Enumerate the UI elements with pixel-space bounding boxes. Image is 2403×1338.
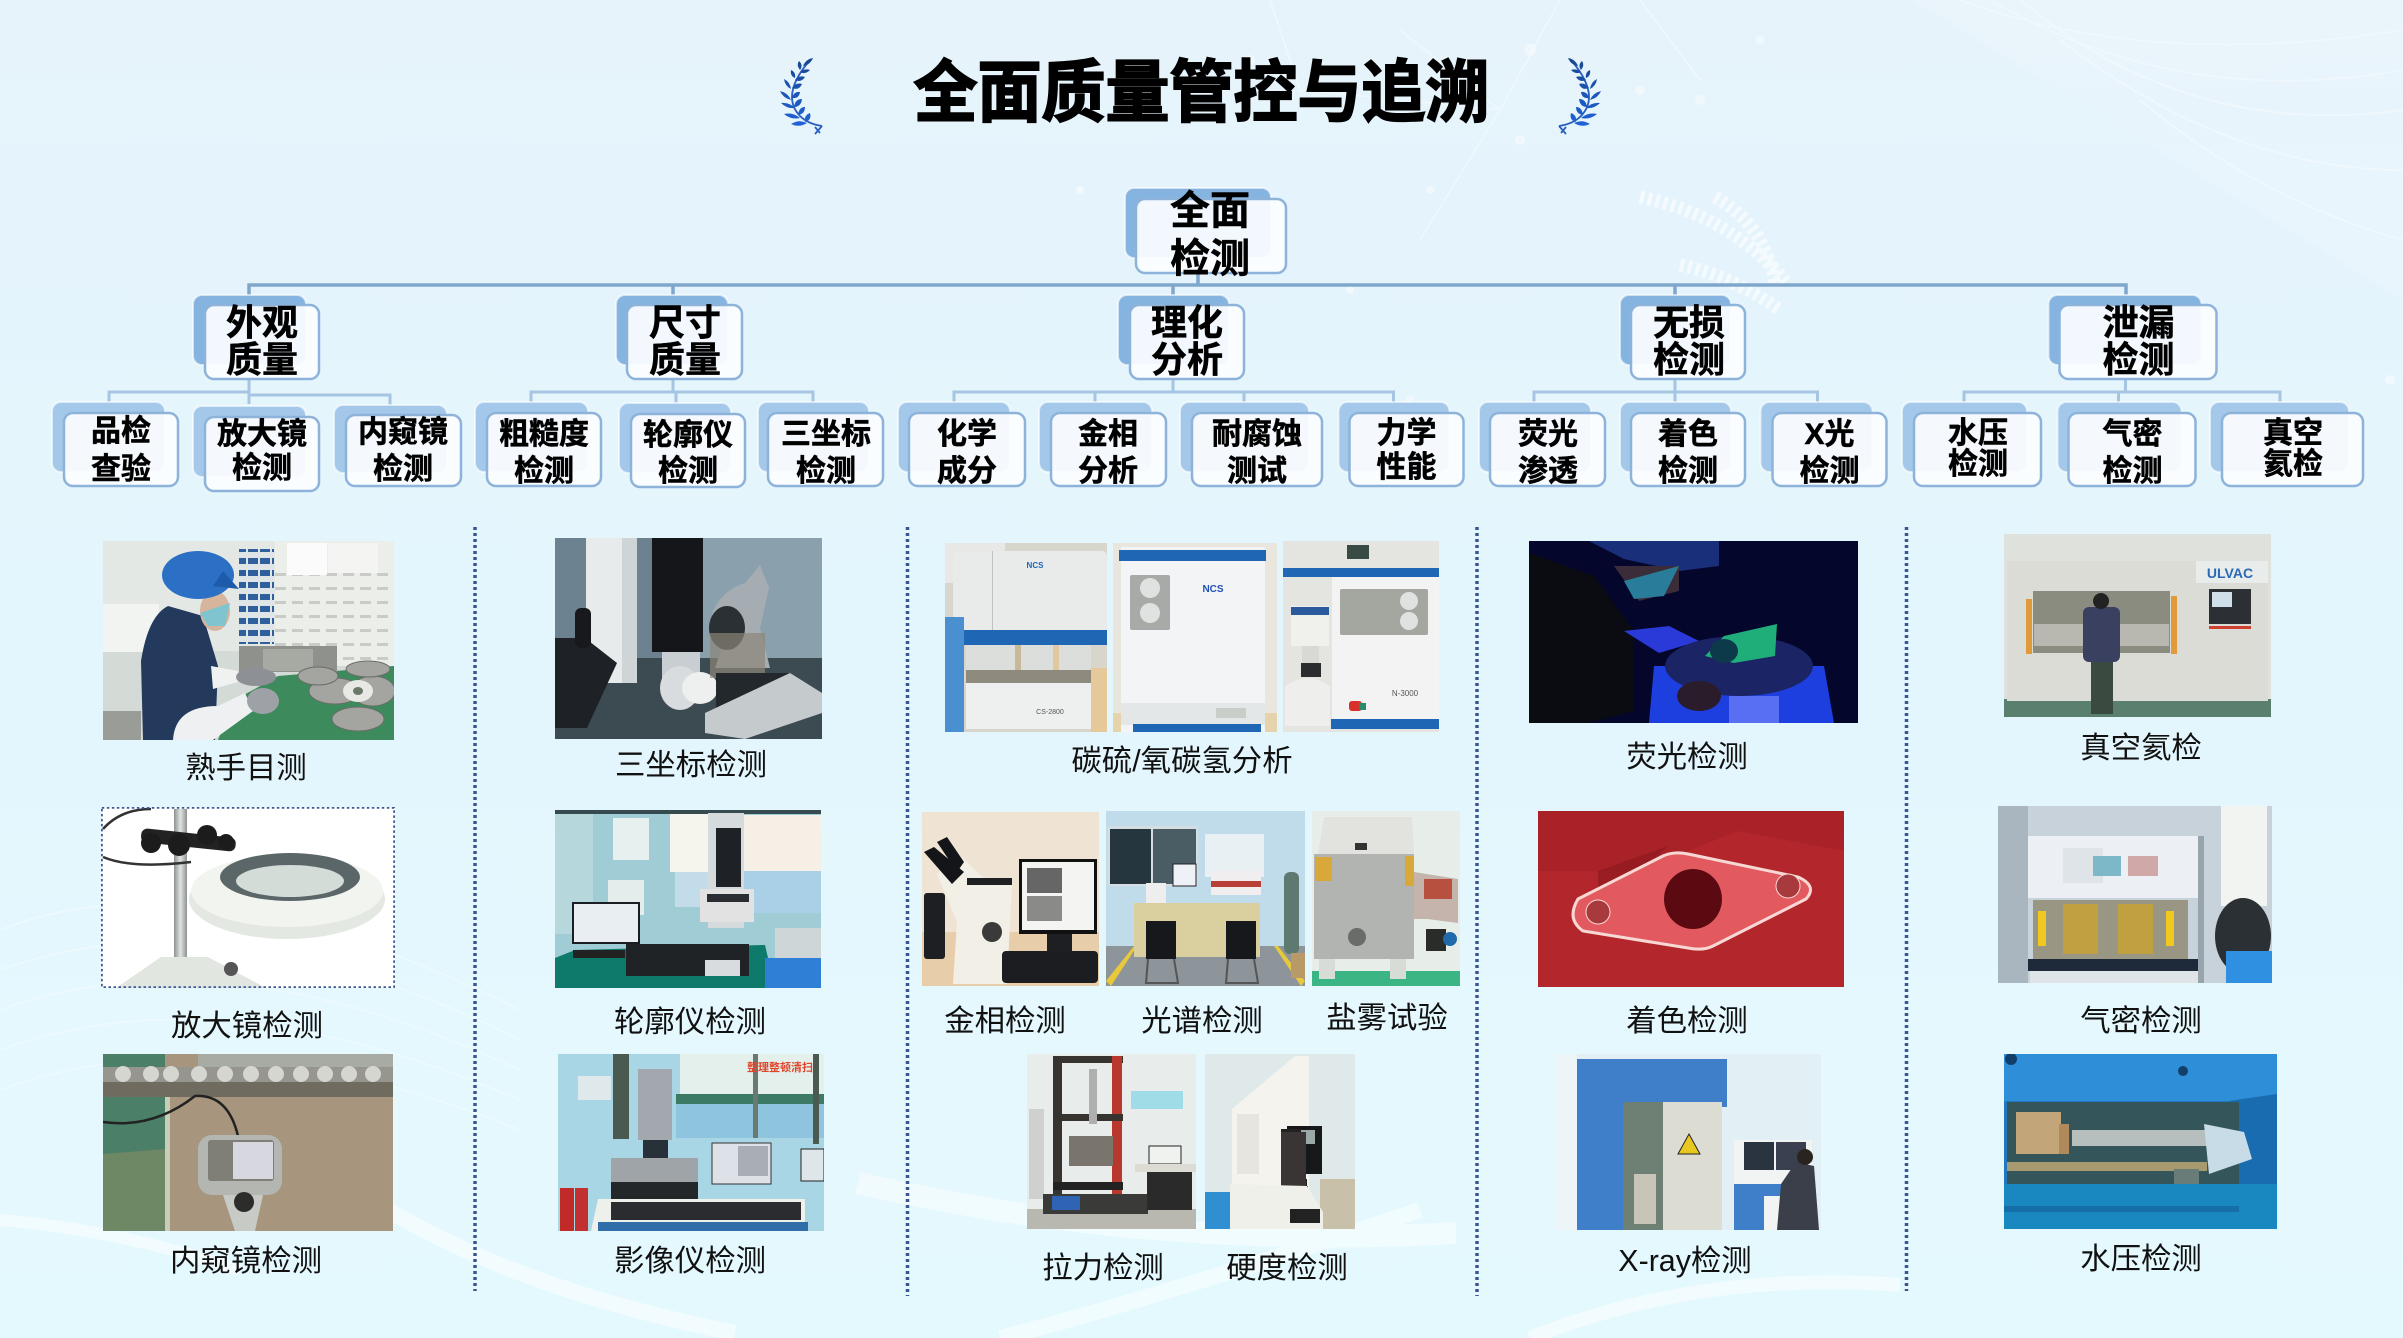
node: 理化分析 xyxy=(1118,295,1244,380)
node: X光检测 xyxy=(1760,402,1886,488)
node: 气密检测: 气密 xyxy=(2102,418,2162,451)
node: 泄漏检测: 检测 xyxy=(2102,339,2175,380)
photo: 影像仪检测 xyxy=(558,1054,824,1278)
photo: 水压检测 xyxy=(2004,1053,2277,1276)
photo: 碳硫分析仪 2: NCS xyxy=(1202,584,1224,595)
photo: 真空氦检: ULVAC xyxy=(2207,565,2253,581)
node: 三坐标检测 xyxy=(758,402,883,488)
node: 耐腐蚀测试: 耐腐蚀 xyxy=(1212,418,1302,451)
node: 力学性能: 性能 xyxy=(1376,451,1436,484)
node: 着色检测: 检测 xyxy=(1658,455,1718,488)
photo: 放大镜检测: 放大镜检测 xyxy=(171,1009,323,1043)
node: 力学性能 xyxy=(1338,402,1464,486)
photo: 拉力检测 xyxy=(1027,1054,1196,1285)
node: 泄漏检测 xyxy=(2048,295,2216,380)
node: 理化分析: 分析 xyxy=(1151,339,1223,380)
node: 金相分析: 金相 xyxy=(1078,418,1138,451)
title: 全面质量管控与追溯 xyxy=(914,54,1489,130)
node: 水压检测: 水压 xyxy=(1948,417,2008,450)
node: 内窥镜检测: 检测 xyxy=(373,453,433,486)
node: 荧光渗透: 渗透 xyxy=(1518,455,1578,488)
node: 荧光渗透 xyxy=(1479,402,1605,488)
photo: 熟手目测 xyxy=(103,541,395,785)
node: 外观质量 xyxy=(193,295,319,380)
photo: 放大镜检测 xyxy=(101,807,395,1043)
node: 真空氦检: 真空 xyxy=(2263,417,2323,450)
node: 水压检测: 检测 xyxy=(1948,448,2008,481)
photo: 盐雾试验: 盐雾试验 xyxy=(1326,1001,1448,1035)
node: 泄漏检测: 泄漏 xyxy=(2102,302,2175,343)
node: 着色检测 xyxy=(1620,402,1745,488)
node: 理化分析: 理化 xyxy=(1151,302,1223,343)
node: 轮廓仪检测: 轮廓仪 xyxy=(643,419,733,452)
node: 尺寸质量: 尺寸 xyxy=(649,302,721,343)
node: 耐腐蚀测试: 测试 xyxy=(1227,455,1287,488)
node: 粗糙度检测: 检测 xyxy=(514,455,574,488)
photo: 轮廓仪检测 xyxy=(555,810,821,1039)
photo: 碳硫分析仪 CS-2800 xyxy=(945,543,1107,732)
photo: 氧氮氢分析仪 N-3000: 碳硫/氧碳氢分析 xyxy=(1071,744,1293,778)
node: X光检测: 检测 xyxy=(1800,455,1860,488)
photo: 真空氦检: 真空氦检 xyxy=(2080,731,2202,765)
photo: 盐雾试验 xyxy=(1312,811,1460,1035)
node: 内窥镜检测 xyxy=(334,405,461,486)
photo: 气密检测: 气密检测 xyxy=(2080,1004,2202,1038)
node: 化学成分 xyxy=(898,402,1025,488)
node: 水压检测 xyxy=(1902,402,2041,486)
node: 化学成分: 成分 xyxy=(937,455,997,488)
node: 全面检测: 全面 xyxy=(1170,189,1250,233)
node: 金相分析 xyxy=(1039,402,1166,488)
photo: 三坐标检测 xyxy=(555,538,822,782)
node: 金相分析: 分析 xyxy=(1078,455,1138,488)
photo: 氧氮氢分析仪 N-3000 xyxy=(1071,541,1439,778)
node: 尺寸质量: 质量 xyxy=(649,339,721,380)
icon: right laurel xyxy=(1559,58,1601,134)
photo: 荧光检测: 荧光检测 xyxy=(1626,740,1748,774)
photo: 三坐标检测: 三坐标检测 xyxy=(615,748,767,782)
photo: 光谱检测: 光谱检测 xyxy=(1141,1004,1263,1038)
photo: 着色检测: 着色检测 xyxy=(1626,1004,1748,1038)
node: 粗糙度检测 xyxy=(475,402,601,488)
node: 全面检测 xyxy=(1125,188,1286,281)
photo: 熟手目测: 熟手目测 xyxy=(185,751,307,785)
node: 真空氦检 xyxy=(2210,402,2363,486)
node: 力学性能: 力学 xyxy=(1376,417,1436,450)
node: 品检查验: 查验 xyxy=(91,453,151,486)
node: 真空氦检: 氦检 xyxy=(2263,448,2323,481)
node: 品检查验: 品检 xyxy=(91,415,151,448)
node: 气密检测: 检测 xyxy=(2102,455,2162,488)
photo: 内窥镜检测: 内窥镜检测 xyxy=(170,1244,322,1278)
photo: 水压检测: 水压检测 xyxy=(2080,1242,2202,1276)
tree connectors xyxy=(109,273,2280,408)
node: 无损检测: 检测 xyxy=(1653,339,1725,380)
node: 放大镜检测: 检测 xyxy=(232,452,292,485)
photo: 荧光检测 xyxy=(1529,541,1858,774)
photo: X-ray检测 xyxy=(1556,1054,1821,1278)
photo: 硬度检测: 硬度检测 xyxy=(1226,1251,1348,1285)
node: 放大镜检测 xyxy=(193,406,319,491)
node: 化学成分: 化学 xyxy=(937,418,997,451)
photo: 光谱检测 xyxy=(1106,811,1305,1038)
node: 外观质量: 质量 xyxy=(226,339,298,380)
node: 轮廓仪检测 xyxy=(619,403,745,488)
node: 三坐标检测: 三坐标 xyxy=(781,418,871,451)
node: 放大镜检测: 放大镜 xyxy=(217,418,307,451)
node: 粗糙度检测: 粗糙度 xyxy=(499,418,589,451)
photo: 影像仪检测: 整理整顿清扫 xyxy=(747,1060,813,1074)
icon: left laurel xyxy=(780,58,822,134)
node: 轮廓仪检测: 检测 xyxy=(658,455,718,488)
photo: 气密检测 xyxy=(1998,806,2272,1038)
node: 尺寸质量 xyxy=(616,295,742,380)
photo: 真空氦检 xyxy=(2004,534,2271,765)
photo: 碳硫分析仪 CS-2800: CS-2800 xyxy=(1036,709,1064,716)
photo: 金相检测 xyxy=(922,812,1099,1038)
photo: 拉力检测: 拉力检测 xyxy=(1042,1251,1164,1285)
node: 无损检测: 无损 xyxy=(1653,302,1725,343)
node: 无损检测 xyxy=(1620,295,1745,380)
node: 着色检测: 着色 xyxy=(1658,418,1718,451)
photo: 金相检测: 金相检测 xyxy=(944,1004,1066,1038)
photo: 碳硫分析仪 CS-2800: NCS xyxy=(1027,561,1044,570)
node: 三坐标检测: 检测 xyxy=(796,455,856,488)
node: 全面检测: 检测 xyxy=(1170,237,1250,281)
photo: X-ray检测: X-ray检测 xyxy=(1618,1244,1752,1278)
node: 荧光渗透: 荧光 xyxy=(1518,418,1578,451)
node: X光检测: X光 xyxy=(1804,418,1855,451)
node: 品检查验 xyxy=(52,402,178,486)
node: 内窥镜检测: 内窥镜 xyxy=(358,416,448,449)
node: 耐腐蚀测试 xyxy=(1180,402,1322,488)
photo: 硬度检测 xyxy=(1205,1054,1355,1285)
photo: 影像仪检测: 影像仪检测 xyxy=(614,1244,766,1278)
photo: 轮廓仪检测: 轮廓仪检测 xyxy=(614,1005,766,1039)
node: 气密检测 xyxy=(2058,402,2196,488)
photo: 内窥镜检测 xyxy=(103,1054,393,1278)
photo: 碳硫分析仪 2 xyxy=(1113,543,1277,732)
node: 外观质量: 外观 xyxy=(226,302,298,343)
photo: 着色检测 xyxy=(1538,811,1844,1038)
photo: 氧氮氢分析仪 N-3000: N-3000 xyxy=(1392,689,1419,698)
